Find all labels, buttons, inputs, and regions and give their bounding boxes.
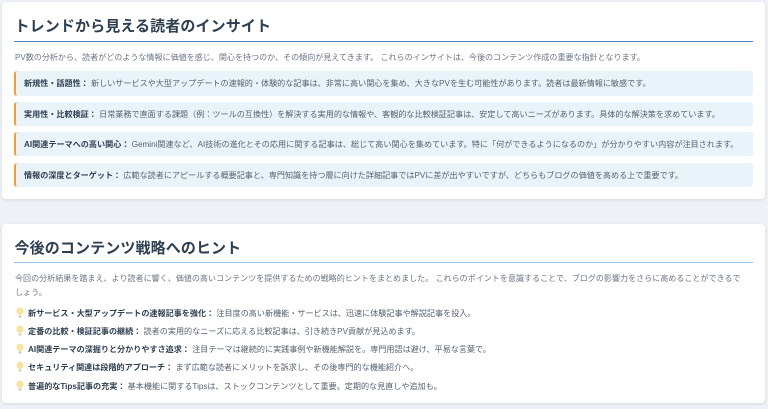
insight: AI interest — [14, 132, 753, 156]
insight: novelty — [14, 71, 753, 96]
icon: light bulb — [16, 362, 24, 372]
hint: breaking news: 新サービス・大型アップデートの速報記事を強化： 注目度の高い新機能・サービスは、迅速に体験記事や解説記事を投入。 — [28, 308, 475, 318]
icon: light bulb — [16, 326, 24, 336]
insight: practicality — [14, 102, 753, 126]
hint: AI themes: AI関連テーマの深掘りと分かりやすさ追求： 注目テーマは継続的に実践事例や新機能解説を。専門用語は避け、平易な言葉で。 — [28, 344, 491, 354]
panel: reader insights — [2, 2, 765, 199]
insight: novelty: 新規性・話題性： 新しいサービスや大型アップデートの速報的・体験的な記事は、非常に高い関心を集め、大きなPVを生む可能性があります。読者は最新情報に敏感です。 — [24, 79, 651, 88]
hint: security: セキュリティ関連は段階的アプローチ： まず広範な読者にメリットを訴求し、その後専門的な機能紹介へ。 — [28, 362, 418, 372]
intro text — [15, 274, 741, 297]
hint: comparison articles: 定番の比較・検証記事の継続： 読者の実用的なニーズに応える比較記事は、引き続きPV貢献が見込めます。 — [28, 326, 420, 336]
insight: depth and target — [14, 163, 753, 187]
heading underline — [14, 262, 753, 263]
icon: light bulb — [16, 308, 24, 318]
intro text: 今回の分析結果を踏まえ、より読者に響く、価値の高いコンテンツを提供するための戦略的ヒントをまとめました。 これらのポイントを意識することで、ブログの影響力をさらに高めることができるで — [15, 274, 741, 283]
heading underline — [14, 41, 753, 42]
heading: insights: トレンドから見える読者のインサイト — [14, 18, 271, 35]
panel: content strategy hints — [2, 224, 765, 403]
icon: light bulb — [16, 380, 24, 390]
intro text: しょう。 — [15, 288, 47, 297]
intro text: PV数の分析から、読者がどのような情報に価値を感じ、関心を持つのか、その傾向が見えてきます。 これらのインサイトは、今後のコンテンツ作成の重要な指針となります。 — [15, 53, 645, 62]
icon: light bulb — [16, 344, 24, 354]
hint: tips articles: 普遍的なTips記事の充実： 基本機能に関するTipsは、ストックコンテンツとして重要。定期的な見直しや追加も。 — [28, 382, 442, 390]
heading: strategy: 今後のコンテンツ戦略へのヒント — [14, 240, 241, 257]
insight: AI interest: AI関連テーマへの高い関心： Gemini関連など、AI技術の進化とその応用に関する記事は、総じて高い関心を集めています。特に「何ができるようになるのか」が分かりやすい内容が注目されます。 — [24, 140, 738, 149]
insight: practicality: 実用性・比較検証： 日常業務で直面する課題（例：ツールの互換性）を解決する実用的な情報や、客観的な比較検証記事は、安定して高いニーズがあります。具体的な解決策を求めています。 — [24, 110, 720, 119]
insight: depth and target: 情報の深度とターゲット： 広範な読者にアピールする概要記事と、専門知識を持つ層に向けた詳細記事ではPVに差が出やすいですが、どちらもブログの価値を高める上で重要です。 — [24, 171, 683, 180]
